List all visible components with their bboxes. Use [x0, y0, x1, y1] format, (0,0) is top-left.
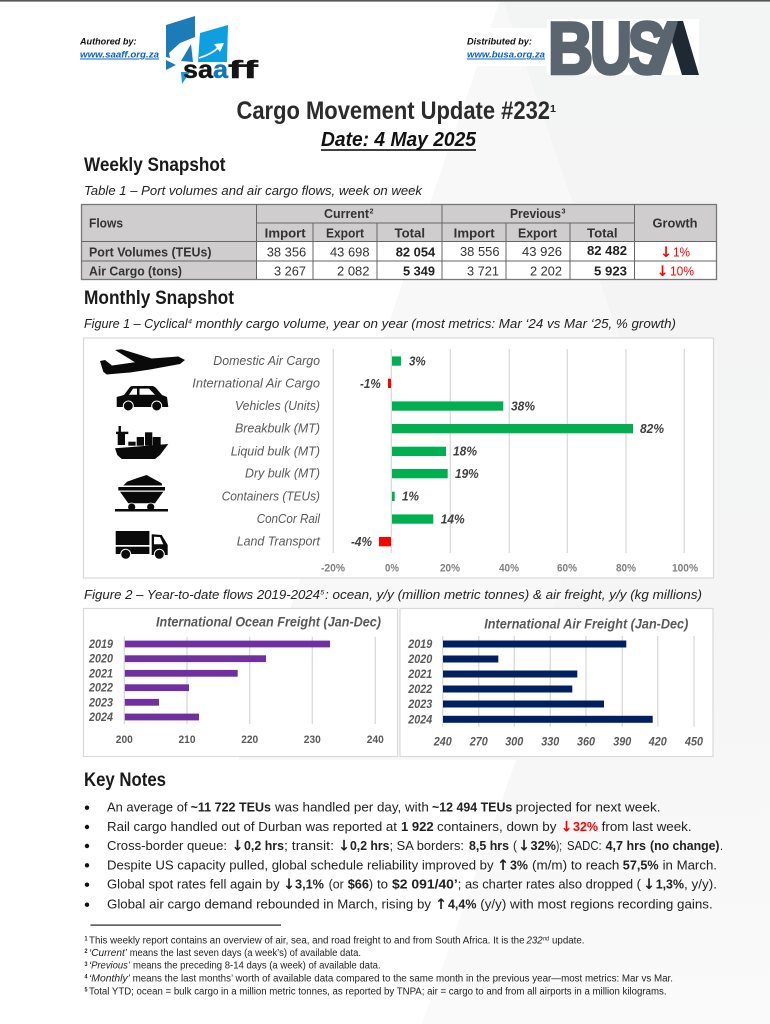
ocean year labels: 2021: [88, 668, 113, 680]
note: rail cargo: containers, down by: [437, 819, 557, 834]
footnote 2: ‘Current’: [89, 948, 128, 959]
note: TEUs per day: ~11 722 TEUs: [191, 800, 271, 815]
chart title: air freight: International Air Freight (Jan-Dec): [484, 616, 689, 631]
note: schedule reliability: (m/m) to reach: [532, 857, 619, 872]
panel: international ocean freight chart: [84, 608, 398, 756]
x axis labels: 20%: [440, 562, 460, 574]
air year labels: 2020: [407, 654, 433, 666]
table: port volumes and air cargo: [82, 204, 716, 280]
note: rail cargo: 32%: [573, 819, 598, 834]
table row: air cargo: 2 202: [530, 263, 562, 278]
value labels: 1%: [402, 489, 419, 504]
category labels: Land Transport: [237, 534, 321, 549]
footnote 1: nd: [543, 936, 549, 942]
note: spot rates: $2 091/40’: [392, 877, 458, 892]
air bars: [443, 640, 653, 723]
note: air cargo demand: 4,4%: [448, 897, 477, 912]
table row: air cargo: ↓: [656, 264, 668, 280]
ocean axis labels: [116, 734, 384, 746]
distributed by credit: www.busa.org.za: [467, 50, 545, 60]
table header: 2: [370, 208, 374, 216]
category labels: ConCor Rail: [257, 511, 321, 526]
icon: BUSA logo: B: [548, 8, 593, 90]
ocean bars: [125, 641, 330, 720]
footnote 5: 5: [84, 986, 88, 994]
table header: Previous: [510, 206, 561, 221]
table header: Total: [587, 225, 618, 240]
air axis labels: 450: [684, 736, 704, 748]
note: spot rates: $66: [348, 877, 369, 892]
air axis labels: 270: [469, 736, 488, 748]
ocean year labels: [88, 639, 114, 724]
table header: Export: [326, 225, 365, 240]
x axis labels: 80%: [616, 562, 636, 574]
ocean axis labels: 200: [116, 734, 133, 746]
note: schedule reliability: [85, 857, 717, 874]
value labels: -1%: [360, 376, 381, 391]
icon: saaff logo: ff: [228, 56, 259, 84]
x axis labels: 0%: [385, 562, 399, 574]
note: TEUs per day: was handled per day, with: [274, 800, 429, 815]
icon: delivery truck: [116, 531, 168, 559]
authored by credit: www.saaff.org.za: [80, 50, 159, 60]
note: spot rates: ; as charter rates also dropped (: [458, 877, 642, 892]
icon: BUSA logo: U: [590, 8, 632, 90]
note: schedule reliability: Despite US capacity pulled, global schedule reliability improved by: [107, 857, 494, 872]
x axis labels: 40%: [499, 562, 519, 574]
note: air cargo demand: ↑: [435, 897, 447, 913]
value labels: 82%: [640, 421, 664, 436]
air year labels: 2023: [407, 699, 433, 711]
note: cross-border: );: [556, 838, 562, 853]
key notes list: [85, 800, 723, 913]
air year labels: 2019: [407, 639, 433, 651]
ocean year labels: 2022: [88, 683, 114, 695]
footnote 4: ‘Monthly’: [89, 973, 131, 984]
table row: port volumes: [89, 243, 690, 261]
note: schedule reliability: 3%: [510, 857, 528, 872]
air axis labels: 300: [505, 736, 524, 748]
caption: figure 1: 4: [188, 318, 192, 326]
icon: BUSA logo: S: [628, 8, 666, 90]
x axis labels: 60%: [557, 562, 577, 574]
note: cross-border: ; SA borders:: [390, 838, 464, 853]
value labels: 3%: [409, 354, 426, 368]
table row: air cargo: [89, 263, 694, 280]
table header: [89, 206, 698, 240]
note: spot rates: to: [377, 877, 388, 892]
air year labels: 2024: [407, 714, 433, 726]
note: cross-border: ↓: [518, 838, 530, 854]
footnotes: [84, 935, 673, 997]
air axis labels: 390: [613, 736, 632, 748]
table row: air cargo: 10%: [670, 263, 694, 278]
note: cross-border: Cross-border queue:: [107, 838, 227, 853]
caption: figure 2: Figure 2 – Year-to-date flows 2019-2024: [84, 587, 320, 602]
category labels: Vehicles (Units): [235, 398, 320, 413]
note: cross-border: ; transit:: [284, 838, 334, 853]
note: cross-border: (: [513, 838, 518, 853]
note: cross-border: 32%: [530, 838, 556, 853]
authored by credit: [79, 36, 159, 60]
note: cross-border: SADC:: [567, 838, 602, 853]
note: rail cargo: [85, 819, 692, 836]
value labels: 14%: [441, 511, 465, 526]
note: rail cargo: Rail cargo handled out of Durban was reported at: [107, 819, 397, 834]
note: cross-border: 0,2 hrs: [244, 838, 284, 853]
note: cross-border: ↓: [232, 838, 244, 854]
air axis labels: 330: [541, 736, 560, 748]
air axis labels: [433, 736, 704, 748]
note: cross-border: .: [720, 838, 723, 853]
caption: figure 2: [84, 587, 702, 602]
caption: table 1: Table 1 – Port volumes and air cargo flows, week on week: [84, 183, 424, 198]
table row: port volumes: 38 556: [460, 244, 500, 259]
note: cross-border: [85, 838, 723, 854]
air axis labels: 360: [577, 736, 596, 748]
ocean year labels: 2024: [88, 712, 114, 724]
x axis labels: [321, 562, 698, 574]
table header: Current: [324, 206, 370, 221]
air axis labels: 420: [648, 736, 667, 748]
bar chart: growth bars: [379, 356, 633, 546]
category labels: Containers (TEUs): [222, 488, 320, 503]
note: cross-border: (no change): [650, 838, 720, 853]
table row: port volumes: 1%: [673, 244, 690, 260]
note: cross-border: 8,5 hrs: [469, 838, 509, 853]
note: air cargo demand: (y/y) with most regions recording gains.: [480, 897, 713, 912]
footnote 1: update.: [552, 935, 584, 946]
table row: air cargo: 5 349: [403, 263, 435, 278]
heading: weekly snapshot: Weekly Snapshot: [84, 154, 226, 176]
note: TEUs per day: [85, 800, 661, 815]
note: spot rates: Global spot rates fell again by: [107, 877, 280, 892]
table header: Export: [518, 225, 558, 240]
panel: international air freight chart: [400, 608, 713, 756]
table header: Import: [454, 225, 495, 240]
note: rail cargo: 1 922: [401, 819, 434, 834]
value labels: [351, 354, 664, 549]
note: schedule reliability: in March.: [663, 857, 717, 872]
footnote 4: 4: [84, 974, 88, 980]
icon: saaff logo: a: [213, 56, 229, 84]
table header: 3: [562, 208, 566, 216]
heading: monthly snapshot: Monthly Snapshot: [84, 287, 234, 309]
distributed by credit: [465, 28, 547, 66]
air axis labels: 240: [433, 736, 452, 748]
table header: Flows: [89, 216, 123, 231]
table row: air cargo: 3 267: [274, 263, 306, 278]
note: TEUs per day: An average of: [107, 800, 188, 815]
caption: figure 1: monthly cargo volume, year on year (most metrics: Mar ‘24 vs Mar ‘25, % growth): [196, 316, 676, 331]
note: spot rates: ↓: [643, 877, 655, 893]
value labels: 38%: [511, 398, 535, 414]
category labels: [192, 353, 321, 549]
footnote 3: means the preceding 8-14 days (a week) of available data.: [133, 961, 381, 972]
distributed by credit: Distributed by:: [467, 36, 532, 48]
heading: key notes: Key Notes: [84, 769, 166, 791]
table row: port volumes: 82 482: [587, 243, 627, 258]
value labels: 18%: [453, 444, 477, 459]
icon: airplane: [100, 349, 185, 374]
value labels: -4%: [351, 534, 372, 549]
footnote 3: ‘Previous’: [89, 961, 131, 972]
value labels: 19%: [455, 466, 479, 481]
footnote 4: means the last months’ worth of available data compared to the same month in the previous year—most metrics: Mar vs Mar.: [133, 973, 673, 984]
ocean year labels: 2020: [88, 654, 114, 666]
title: 1: [550, 103, 556, 115]
x axis labels: 100%: [672, 562, 698, 574]
title: Cargo Movement Update #232: [236, 97, 550, 125]
note: cross-border: ↓: [338, 838, 350, 854]
note: cross-border: 0,2 hrs: [350, 838, 390, 853]
table row: port volumes: ↓: [660, 245, 672, 261]
table row: port volumes: 82 054: [396, 245, 436, 260]
table header: Import: [265, 225, 306, 240]
icon: saaff logo: [166, 16, 259, 84]
icon: saaff logo: sa: [183, 56, 214, 84]
x axis labels: -20%: [321, 562, 345, 574]
category labels: International Air Cargo: [192, 376, 320, 390]
panel: figure 1 cyclical monthly cargo volume: [84, 338, 714, 578]
ocean axis labels: 240: [367, 734, 384, 746]
category labels: Breakbulk (MT): [235, 421, 320, 436]
note: air cargo demand: [85, 897, 713, 913]
note: spot rates: 3,1%: [295, 877, 324, 892]
air year labels: 2022: [407, 684, 433, 696]
note: air cargo demand: Global air cargo demand rebounded in March, rising by: [107, 897, 432, 912]
note: spot rates: , y/y).: [684, 877, 717, 892]
category labels: Liquid bulk (MT): [231, 443, 320, 458]
icon: coal rail wagon: [115, 475, 168, 512]
table row: port volumes: Port Volumes (TEUs): [89, 245, 212, 260]
table header: Growth: [652, 216, 698, 231]
caption: figure 2: 5: [320, 590, 325, 596]
ocean axis labels: 210: [178, 734, 196, 746]
table row: air cargo: Air Cargo (tons): [89, 263, 182, 278]
footnote 3: 3: [84, 961, 88, 968]
footnote 2: 2: [84, 948, 88, 955]
note: spot rates: ): [369, 877, 373, 892]
ocean year labels: 2019: [88, 639, 114, 651]
table row: port volumes: 38 356: [267, 245, 306, 260]
icon: BUSA logo: [547, 8, 699, 90]
date: Date: 4 May 2025: [321, 129, 477, 151]
chart title: ocean freight: International Ocean Freight (Jan-Dec): [156, 615, 381, 630]
note: spot rates: 1,3%: [656, 877, 684, 892]
air year labels: [407, 639, 433, 726]
table row: air cargo: 2 082: [337, 263, 370, 278]
note: rail cargo: from last week.: [602, 819, 692, 834]
category labels: Domestic Air Cargo: [213, 353, 320, 368]
note: spot rates: [85, 877, 717, 893]
table header: Total: [394, 225, 425, 240]
note: spot rates: ↓: [283, 877, 295, 893]
category labels: Dry bulk (MT): [245, 466, 320, 481]
note: cross-border: 4,7 hrs: [606, 838, 646, 853]
note: TEUs per day: projected for next week.: [516, 800, 661, 815]
ocean year labels: 2023: [88, 697, 114, 709]
footnote 1: 1: [84, 936, 88, 942]
note: schedule reliability: 57,5%: [623, 857, 659, 872]
caption: figure 2: : ocean, y/y (million metric tonnes) & air freight, y/y (kg millions): [325, 587, 702, 602]
footnote 5: Total YTD; ocean = bulk cargo in a million metric tonnes, as reported by TNPA; air = cargo to and from all airports in a million kilograms.: [89, 986, 666, 997]
note: TEUs per day: ~12 494 TEUs: [432, 800, 512, 815]
table row: port volumes: 43 926: [522, 244, 562, 259]
air year labels: 2021: [407, 669, 432, 681]
icon: container ship: [115, 426, 168, 459]
table row: air cargo: 5 923: [594, 263, 627, 278]
ocean axis labels: 230: [304, 734, 321, 746]
table row: air cargo: 3 721: [467, 263, 499, 278]
footnote 1: This weekly report contains an overview of air, sea, and road freight to and from South Africa. It is the: [89, 935, 524, 946]
note: rail cargo: ↓: [560, 820, 572, 836]
ocean axis labels: 220: [241, 734, 258, 746]
footnote 1: 232: [525, 935, 543, 946]
note: schedule reliability: ↑: [497, 858, 509, 874]
note: spot rates: (or: [329, 877, 344, 892]
footnote 2: means the last seven days (a week’s) of available data.: [130, 948, 361, 959]
table row: port volumes: 43 698: [330, 245, 370, 260]
icon: car: [117, 386, 168, 411]
caption: figure 1: Figure 1 – Cyclical: [84, 316, 189, 331]
authored by credit: Authored by:: [79, 36, 136, 48]
